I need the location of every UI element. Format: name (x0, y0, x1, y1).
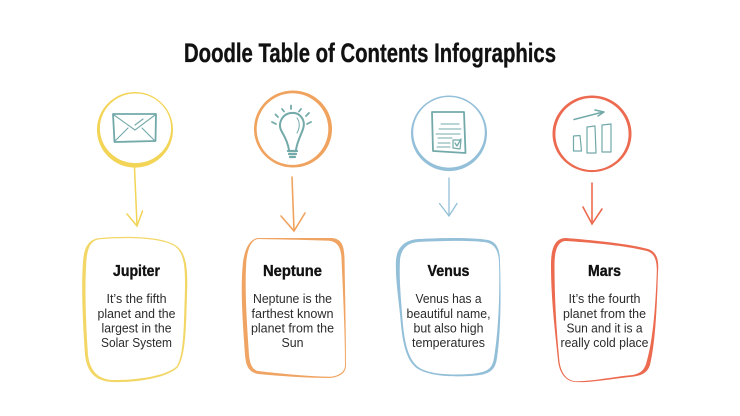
text: Jupiter description: largest in the (102, 322, 172, 336)
text: Venus description: but also high (414, 322, 484, 336)
card: Jupiter (82, 237, 187, 382)
icon: blue circle with document (411, 96, 487, 171)
text: Venus description: beautiful name, (406, 307, 490, 321)
text: Neptune description: Neptune is the (253, 292, 332, 306)
heading: Mars: Mars (588, 263, 621, 280)
panel: Jupiter column (82, 92, 187, 382)
text: Neptune description: farthest known (252, 307, 334, 321)
icon: red circle with bar chart (553, 96, 632, 172)
panel: Neptune column (242, 90, 346, 378)
card: Mars (551, 238, 658, 382)
text: Mars description: really cold place (560, 336, 648, 350)
text: Jupiter description: It’s the fifth (106, 292, 166, 306)
icon: orange circle with light bulb (254, 90, 332, 168)
arrow: blue (440, 178, 457, 216)
text: Neptune description: planet from the (251, 322, 334, 336)
text: Neptune description (251, 292, 334, 350)
text: Venus description: temperatures (412, 336, 485, 350)
heading: Neptune: Neptune (263, 263, 322, 280)
title: Doodle Table of Contents Infographics (184, 38, 556, 68)
text: Jupiter description (98, 292, 176, 350)
text: Mars description: Sun and it is a (566, 322, 642, 336)
panel: Mars column (551, 96, 658, 382)
text: Mars description: It’s the fourth (568, 292, 640, 306)
icon: yellow circle with envelope (97, 92, 173, 168)
card: Venus (396, 238, 501, 376)
text: Venus description (406, 292, 490, 350)
card: Neptune (242, 238, 346, 378)
arrow: orange (281, 177, 305, 231)
heading: Jupiter: Jupiter (113, 263, 160, 280)
panel: Venus column (396, 96, 501, 376)
text: Mars description: planet from the (563, 307, 646, 321)
text: Mars description (560, 292, 648, 350)
heading: Venus: Venus (428, 263, 470, 280)
text: Venus description: Venus has a (416, 292, 482, 306)
text: Jupiter description: planet and the (98, 307, 176, 321)
arrow: yellow (127, 168, 142, 226)
text: Neptune description: Sun (282, 336, 304, 350)
arrow: red (583, 183, 602, 224)
text: Jupiter description: Solar System (101, 336, 172, 350)
